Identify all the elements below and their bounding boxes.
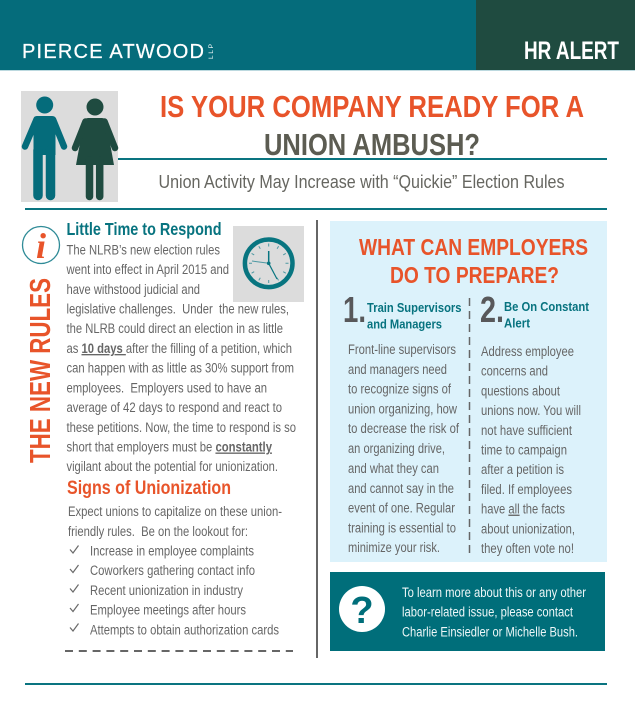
step 2 text: after a petition is	[481, 462, 564, 477]
checklist: signs of unionization: Coworkers gathering contact info	[90, 563, 255, 578]
step 1 text: an organizing drive,	[348, 441, 445, 456]
step 1 text: training is essential to	[348, 520, 456, 535]
step 2 text	[481, 344, 581, 556]
step 2 text: have all the facts	[481, 502, 565, 517]
heading: what can employers do to prepare	[359, 234, 588, 288]
step 2 text: filed. If employees	[481, 482, 572, 497]
icon: woman	[75, 98, 115, 196]
text block: little time to respond: have withstood judicial and	[66, 282, 200, 297]
text block: little time to respond: these petitions. Now, the time to respond is so	[66, 420, 296, 435]
text block: little time to respond: average of 42 days to respond and react to	[66, 400, 282, 415]
step 2 heading: 2.	[480, 289, 504, 330]
icon: question mark: ?	[350, 590, 374, 632]
text block: little time to respond: as 10 days after the filling of a petition, which	[66, 341, 292, 356]
checklist: signs of unionization: Employee meetings after hours	[90, 603, 246, 618]
vertical heading: the new rules: THE NEW RULES	[25, 278, 57, 463]
icon: clock	[233, 226, 304, 302]
heading: what can employers do to prepare: DO TO PREPARE?	[390, 262, 559, 288]
step 2 text: Address employee	[481, 344, 574, 359]
step 1 text	[348, 342, 459, 555]
checklist: signs of unionization: Increase in employee complaints	[90, 544, 254, 558]
step 1 text: to recognize signs of	[348, 382, 451, 397]
step 2 text: concerns and	[481, 364, 548, 379]
step 1 text: and what they can	[348, 461, 439, 476]
step 2 heading: Alert	[504, 316, 531, 330]
icon: man	[25, 96, 64, 196]
checklist: signs of unionization: Attempts to obtain authorization cards	[90, 622, 279, 637]
text block: little time to respond: employees. Employers used to have an	[66, 380, 267, 395]
text block: little time to respond: legislative challenges. Under the new rules,	[66, 302, 289, 316]
text block: little time to respond: vigilant about the potential for unionization.	[66, 459, 278, 474]
logo: Pierce Atwood LLP: PIERCE ATWOOD	[22, 41, 204, 63]
callout: contact	[330, 572, 605, 651]
step 2 text: they often vote no!	[481, 541, 574, 556]
step 2 text: about unionization,	[481, 521, 575, 536]
text block: little time to respond	[66, 242, 296, 474]
step 1 text: Front-line supervisors	[348, 342, 456, 357]
step 2 text: questions about	[481, 383, 560, 398]
step 2 text: time to campaign	[481, 442, 567, 458]
callout text: labor-related issue, please contact	[402, 605, 573, 620]
title	[160, 89, 584, 162]
panel: the new rules	[22, 219, 304, 637]
heading: signs of unionization: Signs of Unionization	[67, 478, 231, 499]
step 2 text: unions now. You will	[481, 403, 581, 418]
text block: little time to respond: short that employers must be constantly	[66, 440, 272, 454]
callout text	[402, 585, 586, 639]
step 1 text: and managers need	[348, 362, 447, 377]
step 1 text: event of one. Regular	[348, 501, 455, 516]
step 1 heading: 1.	[343, 289, 366, 330]
checklist: signs of unionization: Recent unionization in industry	[90, 583, 243, 598]
heading: little time to respond: Little Time to Respond	[66, 219, 222, 239]
logo: Pierce Atwood LLP: LLP	[208, 44, 215, 59]
text block: signs intro	[68, 504, 282, 539]
step 2 heading: Be On Constant	[504, 300, 590, 314]
text block: little time to respond: The NLRB’s new election rules	[66, 242, 220, 258]
step 1 text: minimize your risk.	[348, 540, 440, 555]
subtitle: Union Activity May Increase with “Quickie” Election Rules	[158, 172, 564, 192]
step 1 text: union organizing, how	[348, 401, 457, 416]
step 1 text: to decrease the risk of	[348, 421, 459, 436]
callout text: Charlie Einsiedler or Michelle Bush.	[402, 624, 578, 639]
heading: what can employers do to prepare: WHAT CAN EMPLOYERS	[359, 234, 588, 260]
text block: little time to respond: went into effect in April 2015 and	[66, 262, 229, 277]
icon: man and woman	[21, 91, 118, 202]
step 1 heading: and Managers	[367, 318, 442, 332]
step 2 heading	[480, 289, 590, 330]
step 1 heading	[343, 289, 462, 332]
text block: signs intro: friendly rules. Be on the lookout for:	[68, 524, 248, 539]
step 1 text: and cannot say in the	[348, 481, 454, 496]
header band	[0, 0, 635, 71]
icon: info: i	[36, 226, 46, 266]
text block: little time to respond: the NLRB could direct an election in as little	[66, 321, 283, 336]
text block: little time to respond: can happen with as little as 30% support from	[66, 361, 294, 376]
icon: info	[22, 226, 60, 266]
step 2 text: not have sufficient	[481, 423, 572, 438]
text block: signs intro: Expect unions to capitalize on these union-	[68, 504, 282, 519]
title: UNION AMBUSH?	[264, 127, 480, 162]
step 1 heading: Train Supervisors	[367, 301, 462, 315]
icon: question mark	[339, 586, 385, 632]
panel: what can employers do to prepare	[330, 221, 607, 562]
callout text: To learn more about this or any other	[402, 585, 586, 600]
checklist: signs of unionization	[70, 544, 279, 637]
